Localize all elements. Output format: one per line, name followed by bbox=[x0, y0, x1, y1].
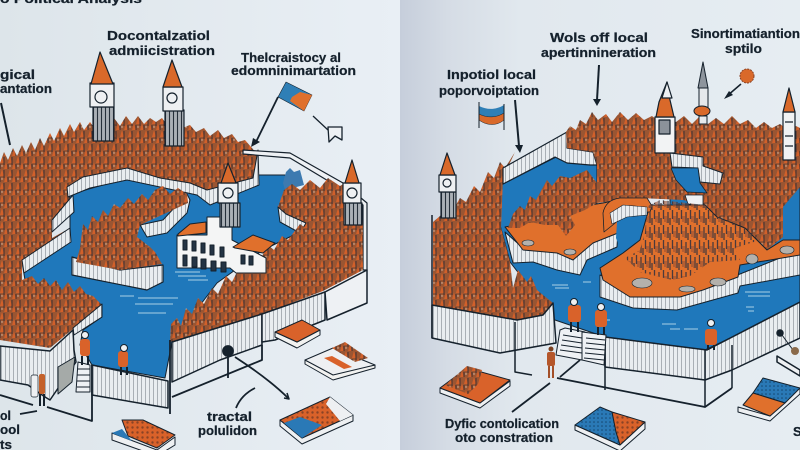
building: town hall bbox=[177, 217, 275, 273]
card: bottom orange tile bbox=[112, 420, 175, 450]
label: tractal polulidon: tractal bbox=[207, 409, 252, 424]
marker dot and pointer bbox=[223, 346, 289, 408]
label: theoretical edministration: edomninimartation bbox=[231, 63, 356, 78]
tower: right map left bbox=[439, 153, 456, 218]
water: under arch bbox=[616, 216, 648, 256]
people bbox=[31, 332, 128, 406]
arrow: to ridge bbox=[593, 65, 601, 106]
card: orange and blue tile bbox=[280, 397, 353, 444]
left page background bbox=[0, 0, 400, 450]
tower: spire bbox=[694, 62, 710, 124]
balloon with arrow bbox=[724, 69, 754, 99]
stairs: right map bbox=[556, 328, 606, 365]
label: logical cut off at left bbox=[0, 67, 52, 96]
wall: front bank sections bbox=[0, 270, 367, 421]
label: bottom left cut off: ool bbox=[0, 422, 20, 437]
right page background with gutter shading bbox=[400, 0, 800, 450]
label: bottom left cut off bbox=[0, 408, 20, 450]
card: orange book bbox=[275, 320, 320, 348]
label: wells of local: apertinnineration bbox=[541, 45, 656, 60]
tower: right map right bbox=[783, 88, 795, 160]
forest: main left bbox=[0, 116, 258, 348]
forest: central ridge bbox=[566, 112, 800, 250]
wall: upper bank bbox=[503, 132, 597, 184]
water: left map bbox=[22, 175, 300, 378]
label: top right: Sinortimatiantion bbox=[691, 26, 800, 41]
land wall: left island bbox=[505, 230, 618, 275]
people: right map bbox=[547, 298, 717, 378]
card: edge tile bbox=[777, 330, 800, 376]
forest: left of right map bbox=[433, 152, 553, 320]
stairs bbox=[76, 362, 90, 392]
label: contolication bbox=[445, 416, 559, 445]
label: top right: sptilo bbox=[725, 41, 762, 56]
card: forest tile bbox=[305, 342, 375, 380]
label: theoretical edministration: Thelcraistocy al bbox=[241, 50, 341, 65]
wall: small peninsula banks bbox=[22, 195, 74, 273]
panel: left map bbox=[0, 52, 375, 450]
arrow: to left forest bbox=[515, 100, 523, 153]
label: bottom left cut off: ol bbox=[0, 408, 11, 423]
water: right map bbox=[500, 155, 800, 350]
label: contolication: oto constration bbox=[455, 430, 553, 445]
label: impact of local population: poporvoiptation bbox=[439, 83, 539, 98]
label: decentralized administration bbox=[107, 28, 215, 58]
card: forest book bbox=[440, 366, 510, 408]
people on far shore bbox=[283, 168, 304, 190]
forest: far right patch bbox=[278, 178, 363, 235]
land: orange right island bbox=[600, 205, 800, 297]
wall: forest tip bbox=[73, 304, 102, 335]
sketch panel by stairs bbox=[58, 357, 75, 394]
label: tractal polulidon: polulidon bbox=[198, 423, 257, 438]
label: tractal polulidon bbox=[198, 409, 257, 438]
panel: right map bbox=[432, 62, 800, 450]
label: wells of local bbox=[541, 30, 656, 60]
label: impact of local population: Inpotiol local bbox=[447, 67, 536, 82]
tower: right map centre bbox=[655, 82, 675, 153]
arrow: edge of left page bbox=[1, 103, 10, 145]
label: logical cut off at left: antation bbox=[0, 81, 52, 96]
small flag bbox=[313, 116, 342, 142]
land: sparse trees bbox=[625, 200, 760, 280]
land: orange left island bbox=[505, 200, 618, 260]
tower: centre bbox=[218, 163, 240, 227]
card: orange and blue tile right bbox=[738, 378, 800, 421]
island with forest bbox=[72, 186, 190, 290]
label: impact of local population bbox=[439, 67, 539, 98]
card: blue and orange tile bbox=[575, 407, 645, 450]
wall: front-centre block bbox=[512, 302, 800, 412]
label: decentralized administration: Docontalzatiol bbox=[107, 28, 210, 43]
label: wells of local: Wols off local bbox=[550, 30, 648, 45]
flag: right map bbox=[479, 102, 504, 130]
label: contolication: Dyfic contolication bbox=[445, 416, 559, 431]
tower: right bbox=[343, 160, 362, 225]
label: top right bbox=[691, 26, 800, 56]
stones bbox=[522, 240, 794, 292]
forest: right of left map bbox=[170, 200, 363, 342]
tower: second bbox=[163, 60, 184, 146]
label: decentralized administration: admiicistration bbox=[109, 43, 215, 58]
label: logical cut off at left: gical bbox=[0, 67, 35, 82]
bridge arch bbox=[603, 198, 652, 232]
water ripples: right map bbox=[552, 282, 770, 329]
arrow and flag bbox=[251, 82, 312, 147]
wall: far right patch bbox=[278, 207, 306, 233]
label: theoretical edministration bbox=[231, 50, 356, 78]
wall: mid-ridge bank bbox=[670, 153, 723, 184]
wall: small ridge step bbox=[685, 195, 703, 206]
water: river inlet bbox=[671, 168, 707, 193]
wall: far bank bbox=[243, 150, 367, 270]
wall: winding channel bank bbox=[67, 150, 259, 205]
forest: left island trees bbox=[508, 170, 597, 236]
tower: far left bbox=[90, 52, 114, 141]
water ripples bbox=[120, 272, 208, 313]
wall: front-left block bbox=[432, 215, 556, 375]
land wall: right island bbox=[600, 250, 800, 310]
